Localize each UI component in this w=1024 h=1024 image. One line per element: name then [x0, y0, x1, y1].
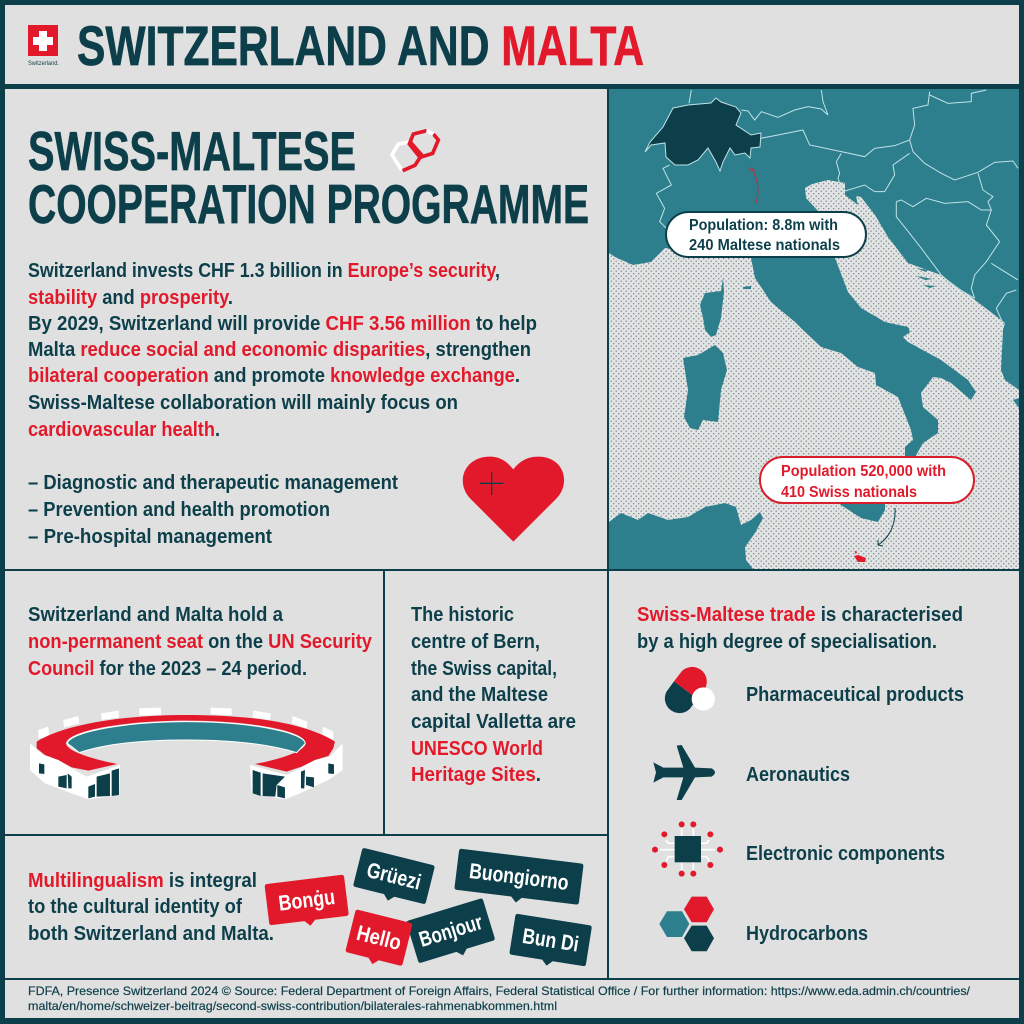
panel: UN Security Council	[5, 571, 383, 834]
text block: heritage sites: Heritage Sites.	[411, 763, 541, 786]
footer: malta/en/home/schweizer-beitrag/second-swiss-contribution/bilaterales-rahmenabkommen.html	[28, 999, 557, 1013]
text block: trade intro	[637, 603, 963, 653]
list: health focus areas: – Prevention and health promotion	[28, 498, 330, 521]
icon: interlinked hexagons	[392, 131, 438, 171]
text block: UN seat: Switzerland and Malta hold a	[28, 603, 284, 626]
map: country borders	[656, 90, 1018, 323]
speech bubble: Bonjour	[406, 898, 497, 968]
text block: heritage sites	[411, 603, 576, 786]
text block: programme description	[28, 259, 537, 441]
text block: programme description: bilateral cooperation and promote knowledge exchange.	[28, 364, 520, 387]
icon: heart	[463, 457, 564, 542]
callout: Malta population: Population 520,000 with	[781, 463, 946, 480]
callout: Switzerland population: Population: 8.8m with	[689, 217, 838, 234]
callout: Switzerland population: 240 Maltese nationals	[689, 237, 840, 254]
text block: heritage sites: centre of Bern,	[411, 630, 540, 653]
panel: cooperation programme	[5, 89, 607, 569]
speech bubble: Bun Di	[508, 914, 592, 972]
panel: trade	[609, 571, 1019, 978]
speech bubble: Bonjour: Bonjour	[416, 909, 486, 952]
map: North Africa	[609, 503, 763, 569]
heading: programme title: SWISS-MALTESE	[28, 120, 356, 182]
arrow: to Switzerland	[749, 168, 758, 203]
text block: multilingualism: to the cultural identity of	[28, 895, 242, 918]
text block: heritage sites: UNESCO World	[411, 737, 543, 760]
list: health focus areas: – Diagnostic and therapeutic management	[28, 471, 398, 494]
text block: heritage sites: The historic	[411, 603, 514, 626]
speech bubble: Bonġu	[264, 875, 350, 931]
text block: programme description: Malta reduce social and economic disparities, strengthen	[28, 338, 531, 361]
callout: Malta population	[760, 457, 974, 503]
map: Switzerland highlighted	[645, 98, 761, 171]
speech bubble: Bun Di: Bun Di	[521, 923, 581, 957]
icon: microchip	[652, 821, 723, 877]
icon: Security Council chamber	[30, 708, 343, 799]
text block: programme description: cardiovascular health.	[28, 418, 220, 441]
header panel	[5, 5, 1019, 84]
text block: UN seat: Council for the 2023 – 24 period.	[28, 657, 307, 680]
speech bubble: Hello	[344, 909, 413, 971]
icon: airplane	[653, 745, 715, 800]
heading: programme title	[28, 120, 589, 235]
callout: Malta population: 410 Swiss nationals	[781, 484, 917, 501]
label: aeronautics: Aeronautics	[746, 763, 850, 786]
label: pharmaceutical products: Pharmaceutical products	[746, 683, 964, 706]
map: Corsica	[700, 278, 724, 337]
text block: programme description: By 2029, Switzerland will provide CHF 3.56 million to help	[28, 312, 537, 335]
text block: multilingualism: both Switzerland and Malta.	[28, 922, 274, 945]
icon: Swiss flag logo: Switzerland.	[28, 61, 59, 67]
speech bubble: Hello: Hello	[354, 920, 404, 955]
speech bubble: Buongiorno	[454, 849, 584, 910]
map: south-east coast	[1013, 398, 1019, 408]
text block: trade intro: Swiss-Maltese trade is characterised	[637, 603, 963, 626]
callout: Switzerland population	[666, 212, 866, 257]
heading: programme title: COOPERATION PROGRAMME	[28, 173, 589, 235]
map: Malta highlighted	[854, 551, 866, 562]
speech bubble: Buongiorno: Buongiorno	[468, 858, 570, 895]
text block: programme description: Switzerland invests CHF 1.3 billion in Europe’s security,	[28, 259, 500, 282]
map: small islands	[743, 268, 936, 289]
text block: heritage sites: the Swiss capital,	[411, 657, 557, 680]
panel: UNESCO World Heritage	[385, 571, 607, 834]
text block: programme description: stability and prosperity.	[28, 286, 233, 309]
icon: pill	[665, 667, 715, 713]
map: Sardinia	[683, 345, 727, 430]
text block: trade intro: by a high degree of specialisation.	[637, 630, 937, 653]
footer: FDFA, Presence Switzerland 2024 © Source: Federal Department of Foreign Affairs, Federal Statistical Office / For further information: https://www.eda.admin.ch/countries/	[28, 984, 971, 998]
panel: map	[609, 89, 1019, 569]
list: health focus areas: – Pre-hospital management	[28, 525, 272, 548]
text block: UN seat	[28, 603, 373, 680]
speech bubbles: greetings	[264, 848, 592, 972]
list: health focus areas	[28, 471, 398, 548]
speech bubble: Grüezi: Grüezi	[364, 857, 424, 895]
text block: heritage sites: and the Maltese	[411, 683, 548, 706]
title: SWITZERLAND AND MALTA	[77, 14, 644, 77]
icon: Swiss flag logo	[28, 25, 59, 67]
speech bubble: Bonġu: Bonġu	[277, 884, 336, 916]
text block: multilingualism: Multilingualism is integral	[28, 869, 257, 892]
text block: UN seat: non-permanent seat on the UN Security	[28, 630, 373, 653]
text block: programme description: Swiss-Maltese collaboration will mainly focus on	[28, 391, 458, 414]
panel: multilingualism	[5, 836, 607, 978]
map: Sicily	[835, 500, 885, 522]
speech bubble: Grüezi	[352, 848, 435, 910]
arrow: to Malta	[878, 508, 895, 546]
map: mainland Europe and Italy	[609, 89, 1019, 457]
icon: hydrocarbon hexagons	[659, 897, 714, 951]
text block: multilingualism	[28, 869, 274, 945]
label: electronic components: Electronic components	[746, 842, 945, 865]
footer	[5, 980, 1019, 1018]
label: hydrocarbons: Hydrocarbons	[746, 922, 868, 945]
text block: heritage sites: capital Valletta are	[411, 710, 576, 733]
